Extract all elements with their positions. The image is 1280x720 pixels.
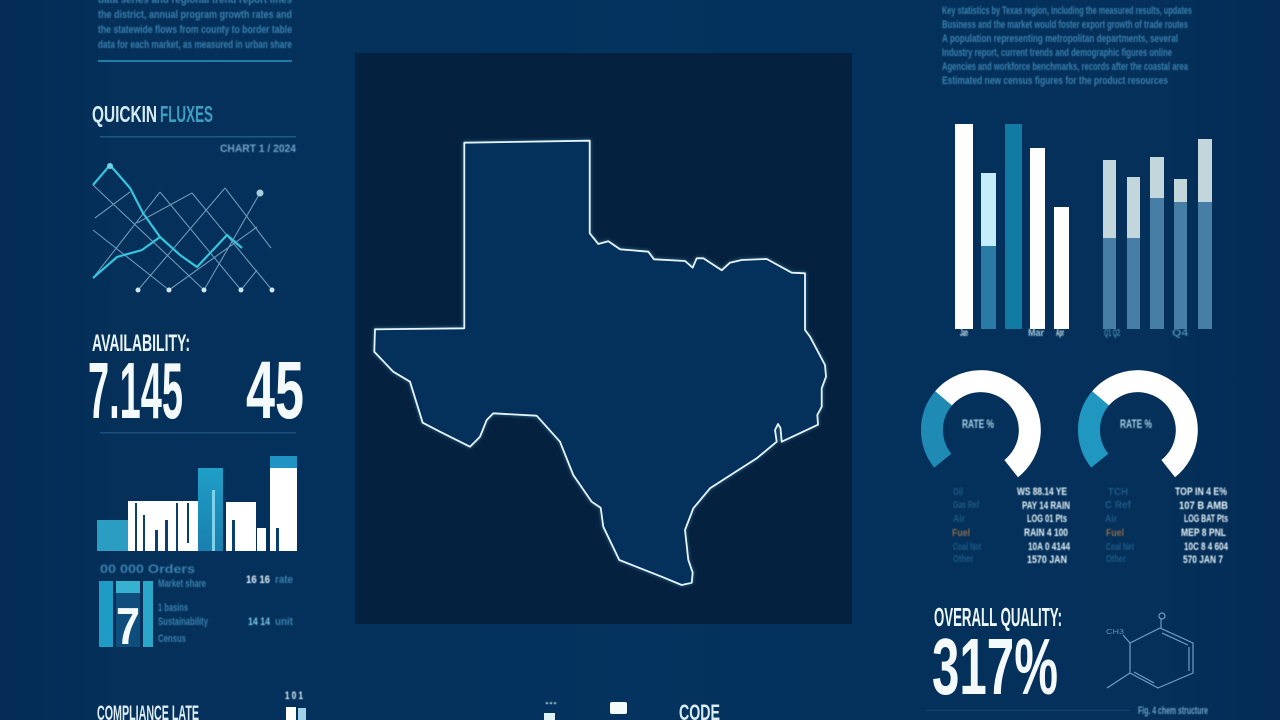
legend and stat block: Sustainability <box>158 616 209 628</box>
donut table: left: Gas Ref <box>953 500 979 511</box>
legend and stat block: rate <box>275 574 293 586</box>
panel: right intro text: Industry report, current trends and demographic figures online <box>942 47 1172 59</box>
legend and stat block: 14 14 <box>248 616 271 628</box>
donut table: right: LOG BAT Pts <box>1184 513 1228 525</box>
icon: molecule diagram: CH3 <box>1106 629 1124 636</box>
footer: center marks <box>544 695 720 720</box>
legend and stat block <box>99 562 293 656</box>
donut table: left: Fuel <box>952 528 970 539</box>
panel: left intro text <box>98 0 292 62</box>
footer: center marks: ... <box>545 695 557 707</box>
panel: right intro text: Estimated new census figures for the product resources <box>942 75 1168 87</box>
bar chart: right group one: Apr <box>1056 328 1064 339</box>
icon: molecule diagram <box>1106 613 1193 688</box>
donut table: right: Coal Net <box>1106 542 1134 553</box>
donut table: left: 10A 0 4144 <box>1028 541 1071 553</box>
line chart <box>93 163 274 292</box>
donut table: right: TOP IN 4 E% <box>1175 486 1227 498</box>
donut table: left: Coal Net <box>953 542 981 553</box>
bar chart: right group two <box>1103 139 1212 339</box>
map: Texas outline <box>374 141 826 585</box>
heading: line chart: CHART 1 / 2024 <box>220 143 297 155</box>
bar chart: right group one <box>955 124 1069 339</box>
bar chart: right group one: Mar <box>1028 328 1044 339</box>
stat: availability: AVAILABILITY: <box>92 330 190 357</box>
stat: availability: 7.145 <box>88 346 183 435</box>
panel: left intro text: the district, annual program growth rates and <box>98 9 292 21</box>
donut table: left: LOG 01 Pts <box>1027 513 1067 525</box>
panel: right intro text: A population representing metropolitan departments, several <box>942 33 1178 45</box>
donut table: left: 1570 JAN <box>1027 554 1067 566</box>
donut chart: right: RATE % <box>1120 417 1152 431</box>
panel: right intro text <box>942 5 1192 87</box>
stat: overall quality: 317% <box>932 622 1058 711</box>
donut table: right: 10C 8 4 604 <box>1184 541 1229 553</box>
legend and stat block: 00 000 Orders <box>100 562 195 576</box>
icon: small footer marker left <box>285 690 306 720</box>
legend and stat block: unit <box>275 616 293 628</box>
donut table: left <box>952 486 1071 566</box>
heading: line chart <box>92 101 297 155</box>
donut table: left: Other <box>953 554 973 565</box>
caption: molecule: Fig. 4 chem structure <box>1138 705 1208 717</box>
bar chart: right group two: Q1 Q2 <box>1104 328 1120 339</box>
bar chart: right group one: Jan <box>960 328 968 339</box>
donut table: right: C Ref <box>1105 500 1132 511</box>
heading: line chart: FLUXES <box>160 101 213 127</box>
heading: line chart: QUICKIN <box>92 101 157 127</box>
donut table: right: 107 B AMB <box>1179 500 1228 512</box>
bar chart: left <box>97 456 297 551</box>
bar chart: right group two: Q4 <box>1172 328 1189 339</box>
stat: overall quality: OVERALL QUALITY: <box>934 602 1062 632</box>
stat: availability: 45 <box>246 345 304 436</box>
donut chart: left: RATE % <box>962 417 994 431</box>
donut chart: left <box>932 381 1030 469</box>
donut table: right <box>1105 486 1229 566</box>
panel: left intro text: the statewide flows from county to border table <box>98 24 292 36</box>
panel: map background <box>355 53 852 624</box>
donut table: right: 570 JAN 7 <box>1183 554 1223 566</box>
legend and stat block: 7 <box>116 598 140 656</box>
donut chart: right <box>1089 381 1187 469</box>
donut table: left: RAIN 4 100 <box>1024 527 1068 539</box>
legend and stat block: Market share <box>158 578 206 590</box>
donut table: right: Fuel <box>1106 528 1124 539</box>
icon: small footer marker left: 1 0 1 <box>285 690 303 702</box>
donut table: left: Air <box>953 514 965 525</box>
legend and stat block: Census <box>158 633 186 645</box>
donut table: left: WS 88.14 YE <box>1017 486 1067 498</box>
legend and stat block: 1 basins <box>158 602 188 614</box>
donut table: right: Other <box>1106 554 1126 565</box>
panel: left intro text: data for each market, as measured in urban share <box>98 39 292 51</box>
donut table: left: PAY 14 RAIN <box>1022 500 1070 512</box>
legend and stat block: 16 16 <box>246 574 270 586</box>
donut table: right: MEP 8 PNL <box>1181 527 1226 539</box>
donut table: right: Air <box>1105 514 1117 525</box>
donut table: left: Oil <box>953 487 963 498</box>
donut table: right: TCH <box>1108 487 1128 498</box>
